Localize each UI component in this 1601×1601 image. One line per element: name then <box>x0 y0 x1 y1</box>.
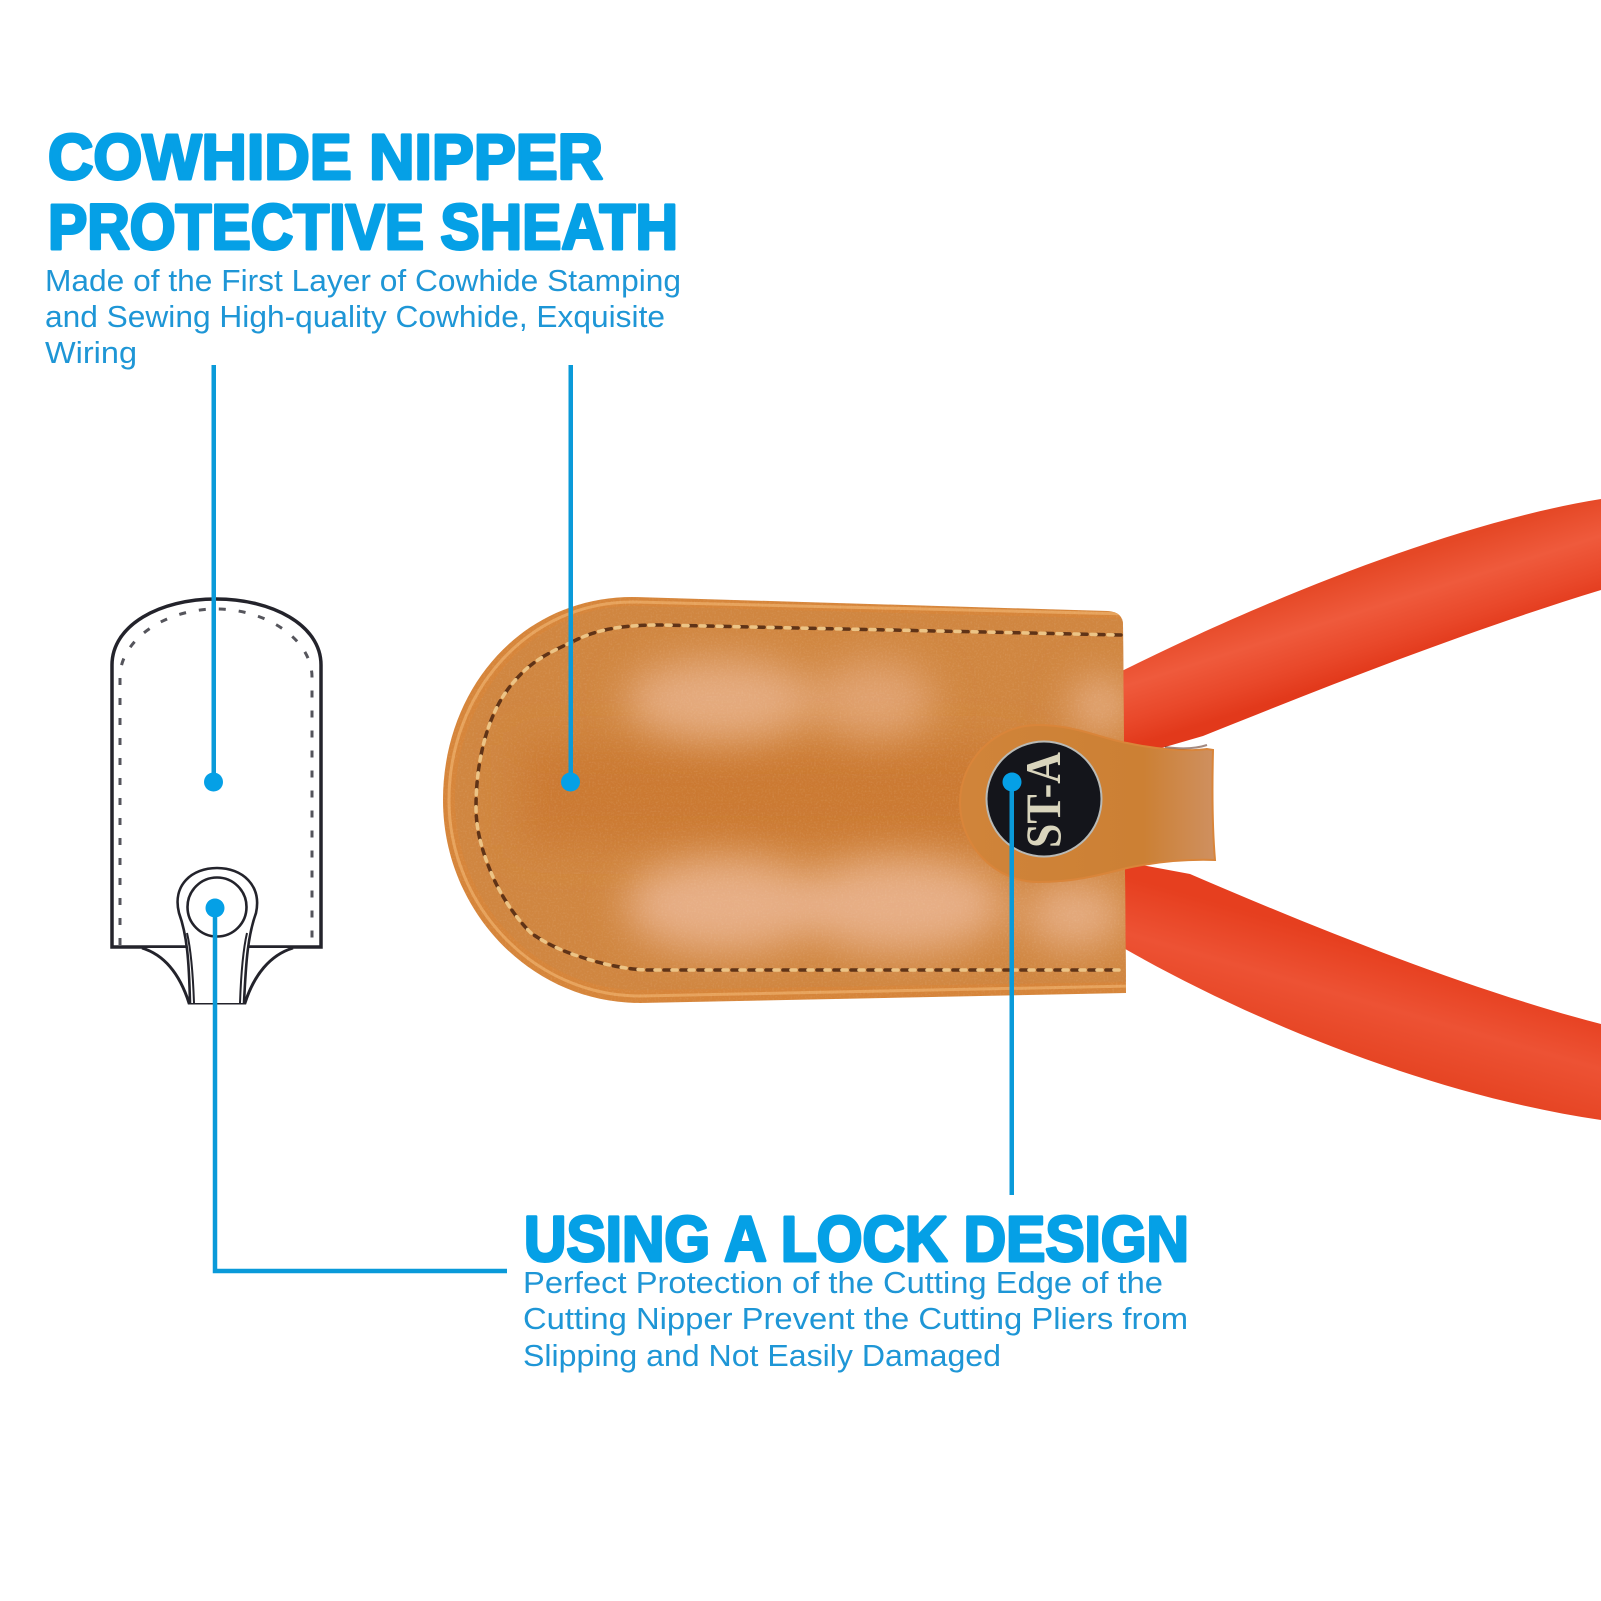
leather rim <box>449 602 1130 996</box>
title: cowhide nipper protective sheath <box>48 121 678 263</box>
lower handle <box>1115 860 1601 1120</box>
description: lock design: Slipping and Not Easily Damaged <box>523 1338 1001 1373</box>
heading: using a lock design: USING A LOCK DESIGN <box>524 1203 1189 1275</box>
callout line: leather body <box>561 365 580 792</box>
description: lock design: Cutting Nipper Prevent the Cutting Pliers from <box>523 1301 1188 1336</box>
product: red plier handles <box>1115 499 1601 1120</box>
stitching <box>476 625 1121 970</box>
lower leather highlights <box>625 859 1125 951</box>
description: first layer of cowhide: and Sewing High-quality Cowhide, Exquisite <box>45 299 665 334</box>
description: first layer of cowhide: Made of the First Layer of Cowhide Stamping <box>45 263 681 298</box>
description: lock design: Perfect Protection of the Cutting Edge of the <box>523 1265 1163 1300</box>
description: first layer of cowhide <box>45 263 681 370</box>
icon: sheath line diagram <box>112 599 321 1003</box>
leather grain <box>443 597 1126 1003</box>
strap shadow over handles <box>1165 745 1207 748</box>
locking strap <box>960 725 1215 882</box>
infographic canvas <box>45 132 1601 1372</box>
title: cowhide nipper protective sheath: COWHIDE NIPPER <box>48 121 603 193</box>
description: first layer of cowhide: Wiring <box>45 335 137 370</box>
callout line: diagram button to lock design text <box>206 898 507 1271</box>
metal button with logo <box>986 740 1102 858</box>
metal button with logo: ST-A <box>1015 752 1071 848</box>
upper leather highlights <box>625 660 1130 740</box>
product: leather sheath <box>443 597 1215 1003</box>
leather inner panel <box>1122 618 1126 982</box>
callout line: metal button <box>1002 772 1022 1195</box>
upper handle <box>1115 499 1601 760</box>
leather shading <box>520 745 1020 845</box>
description: lock design <box>523 1265 1188 1373</box>
title: cowhide nipper protective sheath: PROTECTIVE SHEATH <box>48 191 678 263</box>
callout line: diagram body <box>204 365 223 792</box>
